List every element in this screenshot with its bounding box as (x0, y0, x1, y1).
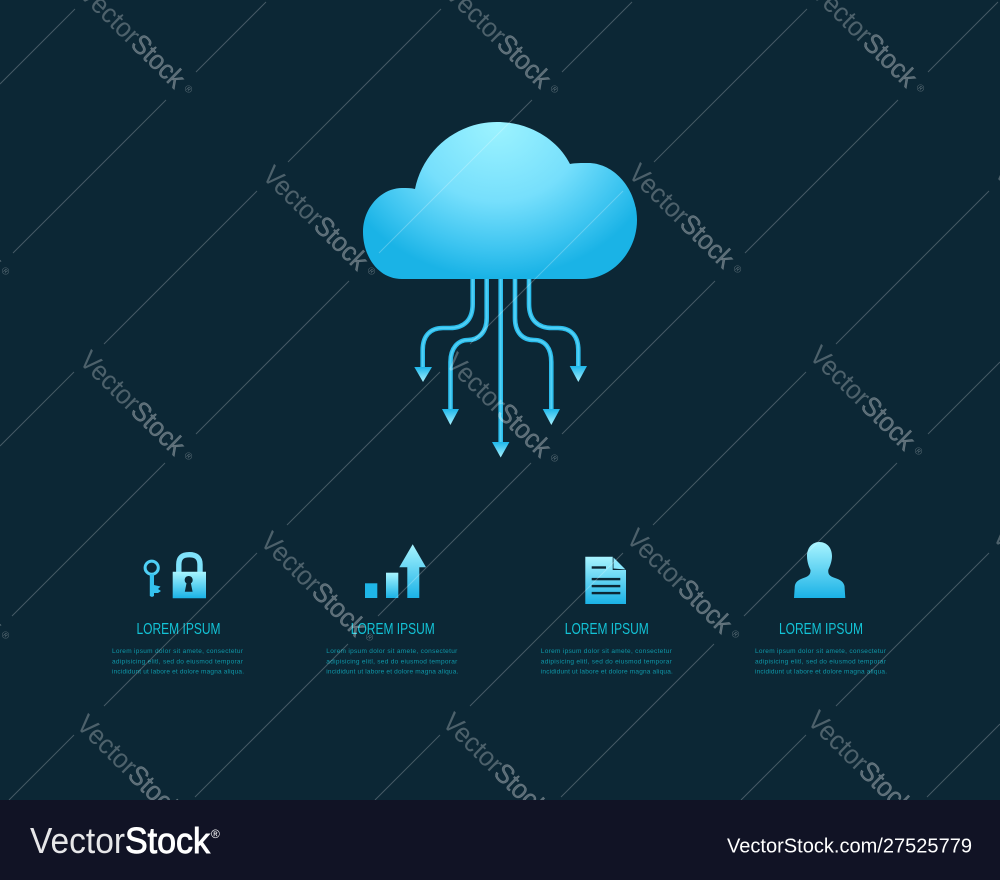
body text: incididunt ut labore et dolore magna aliqua. (326, 668, 458, 676)
icon: key (145, 561, 161, 597)
body text: incididunt ut labore et dolore magna aliqua. (112, 668, 244, 676)
watermark: ® (728, 628, 742, 642)
footer logo: Stock (125, 820, 211, 861)
watermark: Vector (437, 707, 509, 779)
watermark: Vector (255, 526, 327, 598)
watermark: Vector (71, 709, 143, 781)
body text: incididunt ut labore et dolore magna aliqua. (755, 668, 887, 676)
watermark (71, 709, 188, 825)
arrow: inner left (442, 279, 487, 425)
watermark: ® (181, 83, 195, 97)
body text: Lorem ipsum dolor sit amete, consectetur (326, 648, 458, 655)
watermark: Stock (491, 28, 557, 94)
watermark: Stock (308, 210, 374, 276)
column 4 text (755, 621, 887, 676)
cloud (363, 122, 637, 279)
arrow: inner right (515, 279, 560, 425)
column 1 text (112, 621, 244, 676)
watermark: Stock (672, 573, 738, 639)
watermark: Vector (623, 158, 695, 230)
footer logo: ® (211, 827, 220, 841)
watermark: ® (730, 263, 744, 277)
watermark: Stock (491, 397, 557, 463)
watermark: Stock (674, 208, 740, 274)
watermark (0, 160, 18, 286)
watermark: ® (911, 445, 925, 459)
watermark: ® (913, 82, 927, 96)
heading: LOREM IPSUM (136, 621, 220, 638)
watermark: ® (181, 450, 195, 464)
watermark: Vector (74, 345, 146, 417)
body text: adipisicing elitl, sed do eiusmod temporar (112, 658, 244, 665)
icon: growth bars with arrow (365, 544, 426, 598)
column 2 text (326, 621, 458, 676)
body text: adipisicing elitl, sed do eiusmod temporar (755, 658, 887, 665)
watermark: Vector (621, 523, 693, 595)
body text: Lorem ipsum dolor sit amete, consectetur (541, 648, 673, 655)
arrows from cloud (414, 279, 587, 458)
watermark (437, 707, 554, 823)
body text: Lorem ipsum dolor sit amete, consectetur (755, 648, 887, 655)
body text (541, 648, 673, 676)
arrow: far left (414, 279, 473, 382)
watermark (621, 523, 748, 649)
watermark: Stock (855, 390, 921, 456)
watermark: Vector (802, 705, 874, 777)
watermark: Vector (257, 160, 329, 232)
watermark: Stock (853, 755, 919, 821)
arrow: center (492, 279, 509, 458)
footer logo (30, 820, 220, 861)
watermark (0, 524, 18, 650)
icon: padlock (173, 555, 206, 598)
body text: adipisicing elitl, sed do eiusmod temporar (326, 658, 458, 665)
watermark: Stock (857, 27, 923, 93)
body text: incididunt ut labore et dolore magna aliqua. (541, 668, 673, 676)
watermark: ® (364, 265, 378, 279)
watermark (74, 345, 201, 471)
watermark: Vector (804, 340, 876, 412)
heading: LOREM IPSUM (565, 621, 649, 638)
watermark: Stock (306, 576, 372, 642)
arrow: far right (529, 279, 587, 382)
footer url: VectorStock.com/27525779 (727, 836, 972, 858)
watermark (623, 158, 750, 284)
column 3 text (541, 621, 673, 676)
watermark (255, 526, 382, 652)
watermark (440, 0, 567, 104)
watermark: ® (362, 631, 376, 645)
footer bar (0, 800, 1000, 880)
heading: LOREM IPSUM (779, 621, 863, 638)
watermark: Stock (488, 757, 554, 823)
watermark: ® (547, 83, 561, 97)
watermark (804, 340, 931, 466)
footer logo: Vector (30, 820, 125, 861)
body text: adipisicing elitl, sed do eiusmod temporar (541, 658, 673, 665)
icon: person (794, 542, 845, 598)
watermark: Stock (125, 395, 191, 461)
watermark: Stock (122, 759, 188, 825)
watermark: Vector (440, 347, 512, 419)
body text (755, 648, 887, 676)
heading: LOREM IPSUM (351, 621, 435, 638)
icon: document (585, 557, 626, 604)
body text (326, 648, 458, 676)
watermark (806, 0, 933, 103)
watermark (440, 347, 567, 473)
watermark (802, 705, 919, 821)
watermark: ® (547, 452, 561, 466)
watermark (74, 0, 201, 104)
watermark: Stock (125, 28, 191, 94)
body text: Lorem ipsum dolor sit amete, consectetur (112, 648, 244, 655)
watermark (257, 160, 384, 286)
body text (112, 648, 244, 676)
